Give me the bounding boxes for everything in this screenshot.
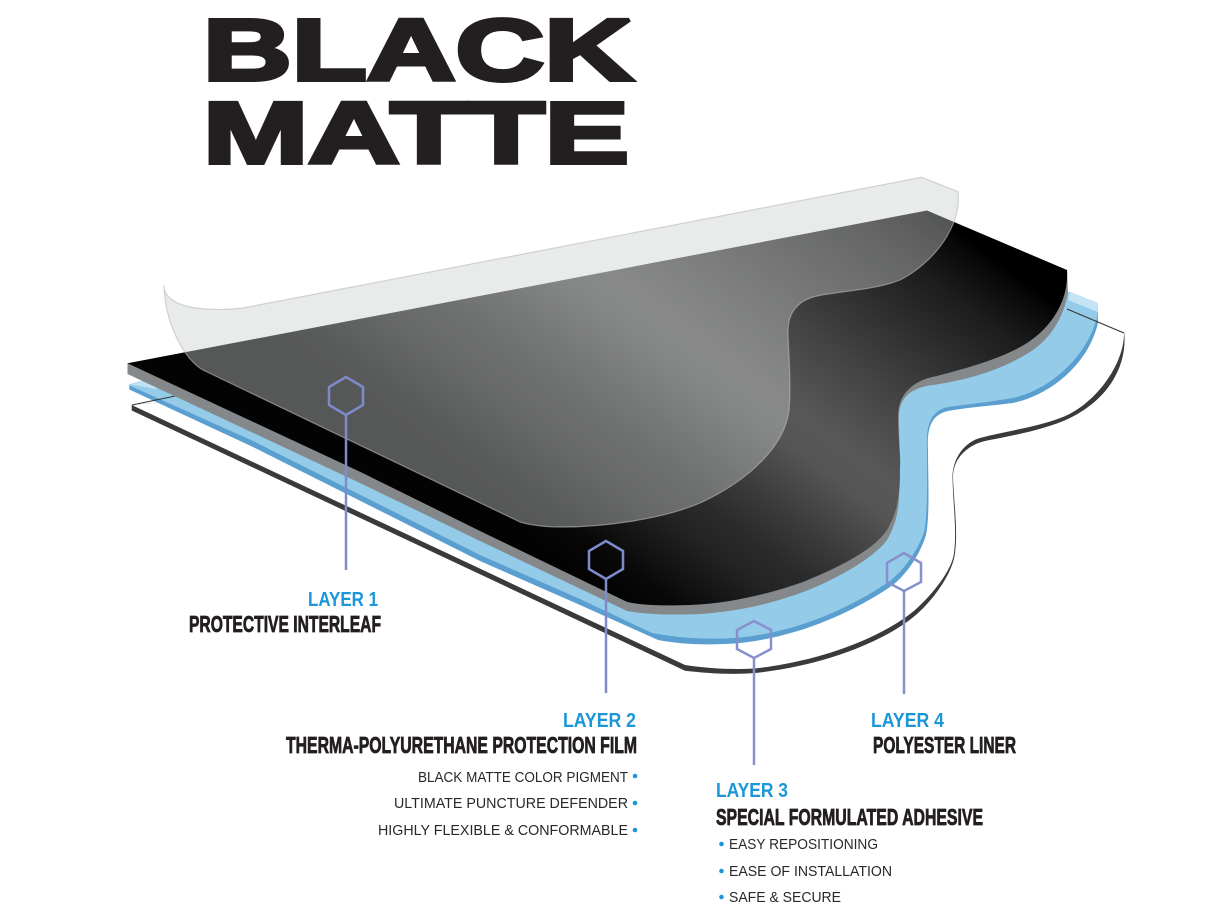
callout marker: layer 3 [737, 621, 771, 765]
label: layer 1 [189, 589, 381, 637]
callout marker: layer 1 [329, 377, 363, 570]
label: layer 4: LAYER 4 [871, 710, 945, 732]
label: layer 1: LAYER 1 [308, 589, 378, 611]
label: layer 3: LAYER 3 [716, 780, 788, 802]
label: layer 2: LAYER 2 [563, 710, 636, 732]
layer stack illustration [128, 177, 1125, 674]
liner back edge hairlines [132, 309, 1124, 405]
label: layer 4 [871, 710, 1016, 758]
label: layer 4: POLYESTER LINER [873, 732, 1016, 758]
label: layer 3: SPECIAL FORMULATED ADHESIVE [716, 804, 983, 830]
callout marker: layer 4 [887, 553, 921, 694]
title: MATTE [203, 85, 629, 182]
layer: protective interleaf [164, 177, 958, 527]
label: layer 2 [286, 710, 637, 839]
label: layer 3: SAFE & SECURE [729, 889, 841, 906]
label: layer 3 [716, 780, 983, 906]
label: layer 2: ULTIMATE PUNCTURE DEFENDER [394, 795, 628, 812]
label: layer 2: HIGHLY FLEXIBLE & CONFORMABLE [378, 822, 628, 839]
title [203, 2, 633, 182]
label: layer 2: THERMA-POLYURETHANE PROTECTION FILM [286, 732, 637, 758]
callout marker: layer 2 [589, 541, 623, 693]
label: layer 1: PROTECTIVE INTERLEAF [189, 611, 381, 637]
layer: polyester liner [132, 309, 1125, 674]
label: layer 2: BLACK MATTE COLOR PIGMENT [418, 769, 628, 786]
label: layer 3: EASY REPOSITIONING [729, 836, 878, 853]
layer: adhesive [129, 292, 1098, 644]
title: BLACK [203, 2, 633, 99]
layer: black matte film [128, 210, 1067, 605]
layer: gray side of film [128, 270, 1068, 615]
label: layer 3: EASE OF INSTALLATION [729, 863, 892, 880]
